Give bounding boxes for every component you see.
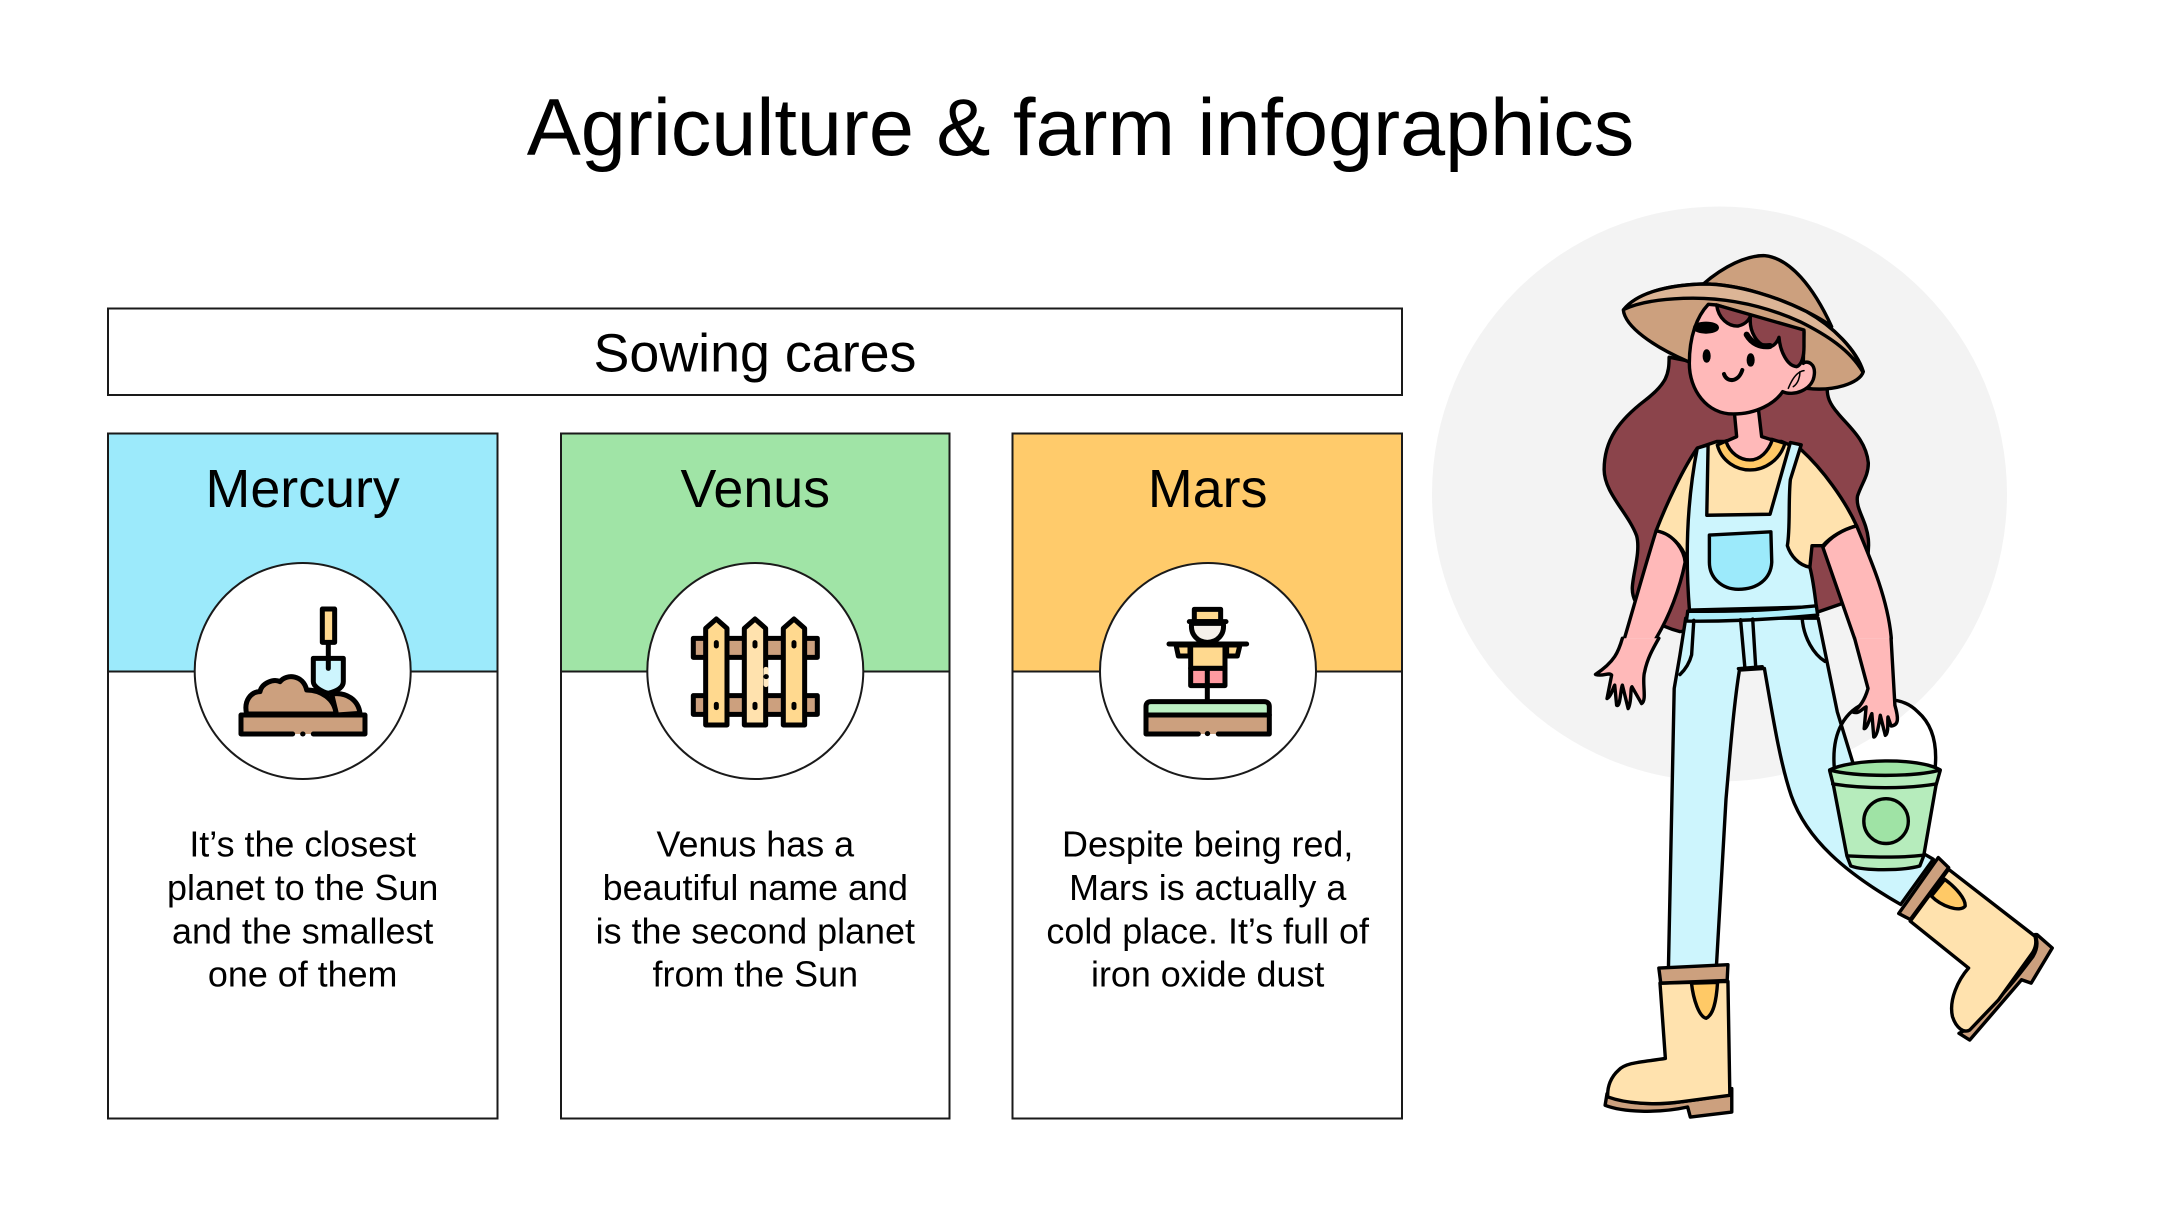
- bucket handle: [1834, 700, 1936, 767]
- grey circle behind farmer: [1432, 206, 2007, 782]
- standing boot: [1605, 965, 1732, 1117]
- Mars icon: scarecrow: [1100, 563, 1316, 779]
- Mars description: Mars is actually a: [1069, 868, 1346, 908]
- waistband: [1686, 606, 1818, 621]
- neck and collar: [1717, 408, 1785, 470]
- hat brim: [1623, 284, 1863, 389]
- raised boot: [1899, 858, 2052, 1040]
- section heading: Sowing cares: Sowing cares: [594, 324, 916, 384]
- shirt: [1656, 442, 1857, 567]
- right hand: [1853, 638, 1897, 737]
- fringe: [1717, 305, 1804, 367]
- right arm: [1823, 526, 1891, 638]
- Venus icon: wooden fence: [647, 563, 863, 779]
- bib pocket: [1709, 532, 1772, 589]
- left arm: [1624, 531, 1685, 638]
- Mars heading: Mars: [1148, 459, 1267, 519]
- Mars description: Despite being red,: [1062, 825, 1353, 865]
- Mercury description: It’s the closest: [189, 825, 416, 865]
- Mercury description: planet to the Sun: [167, 868, 438, 908]
- Venus description: is the second planet: [596, 911, 915, 951]
- Mercury icon: shovel and soil: [195, 563, 411, 779]
- face: [1689, 304, 1814, 414]
- hat crown and band: [1624, 256, 1863, 372]
- eyes, brows and smile: [1695, 323, 1804, 388]
- overalls: [1680, 443, 1825, 675]
- Venus description: from the Sun: [653, 955, 858, 995]
- hair: [1604, 357, 1869, 632]
- title: Agriculture & farm infographics: [527, 83, 1634, 173]
- Venus heading: Venus: [681, 459, 830, 519]
- Venus description: beautiful name and: [603, 868, 908, 908]
- Mars description: iron oxide dust: [1091, 955, 1324, 995]
- bucket: [1830, 761, 1940, 870]
- Mercury heading: Mercury: [206, 459, 400, 519]
- Mercury description: one of them: [208, 955, 397, 995]
- panel: Mars: [1012, 434, 1402, 1118]
- section heading: Sowing cares: [108, 308, 1402, 395]
- illustration: farmer girl with bucket: [1596, 256, 2052, 1117]
- left hand: [1596, 638, 1659, 709]
- Mercury description: and the smallest: [172, 911, 433, 951]
- panel: Venus: [561, 434, 950, 1118]
- Mars description: cold place. It’s full of: [1046, 911, 1370, 951]
- legs: [1668, 618, 1933, 968]
- Venus description: Venus has a: [657, 825, 854, 865]
- panel: Mercury: [108, 434, 498, 1118]
